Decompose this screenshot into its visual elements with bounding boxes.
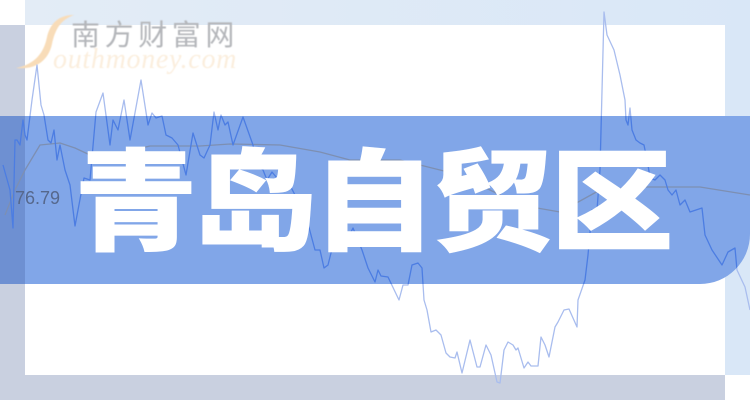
title: 岛 (194, 114, 316, 274)
price line (2, 116, 738, 284)
chart axis value: 76.79 (15, 188, 60, 208)
logo: southmoney watermark (17, 12, 239, 75)
average line (5, 143, 750, 215)
logo latin name: outhmoney.com (53, 44, 237, 75)
title: 区 (551, 114, 673, 274)
title: 贸 (432, 114, 554, 274)
chart over banner: price and average lines (2, 116, 750, 284)
title: 青 (75, 114, 197, 274)
icon: orange swoosh (17, 14, 74, 69)
title (75, 114, 673, 274)
logo chinese name: 南方财富网 (71, 12, 239, 54)
title: 自 (313, 114, 435, 274)
